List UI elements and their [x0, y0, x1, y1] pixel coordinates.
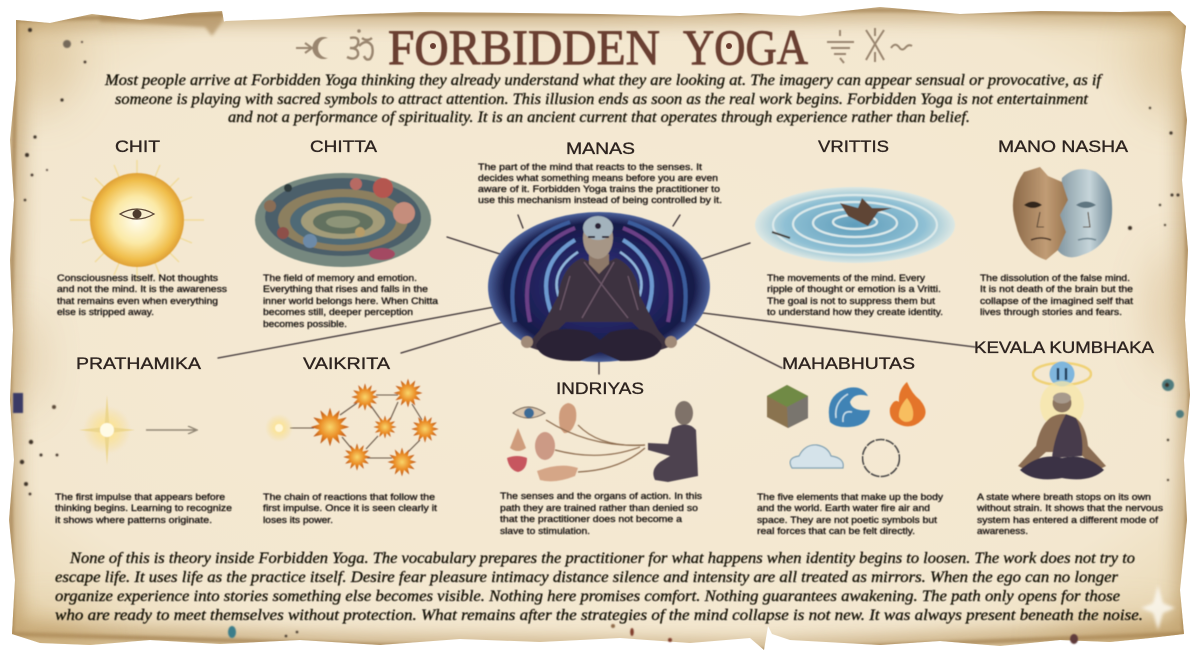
panel: vaikrita: The chain of reactions that follow the [263, 491, 435, 502]
icon: water wave [829, 387, 870, 427]
icon: earth cube [767, 385, 808, 428]
panel: prathamika: PRATHAMIKA [76, 354, 202, 373]
panel: vrittis: to understand how they create identity. [767, 306, 943, 317]
icon: left ornaments [296, 29, 373, 60]
panel: indriyas: that the practitioner does not become a [500, 513, 683, 524]
diagram: chain of reactions [265, 379, 439, 476]
panel: chit: Consciousness itself. Not thoughts [57, 272, 218, 283]
panel: indriyas: INDRIYAS [556, 379, 644, 398]
closing paragraph: organize experience into stories something else becomes visible. Nothing here promises comfort. Nothing guarantees awakening. The path only opens for those [55, 588, 1120, 605]
panel: vrittis [755, 137, 955, 317]
panel: chit: else is stripped away. [57, 306, 154, 317]
panel: mano nasha: MANO NASHA [998, 137, 1129, 156]
illustration: meditating figure in aura [488, 212, 710, 362]
panel: vaikrita: first impulse. Once it is seen clearly it [263, 502, 437, 513]
closing paragraph: None of this is theory inside Forbidden Yoga. The vocabulary prepares the practitioner for what happens when identity begins to loosen. The work does not try to [69, 550, 1135, 567]
illustration: senses tethered to practitioner [507, 401, 698, 482]
panel: mano nasha: lives through stories and fears. [980, 306, 1122, 317]
panel: mahabhutas: The five elements that make up the body [757, 491, 943, 502]
panel: mano nasha [980, 137, 1133, 317]
closing paragraph [55, 550, 1143, 624]
panel: chit [57, 137, 227, 317]
intro paragraph: and not a performance of spirituality. It is an ancient current that operates through experience rather than belief. [228, 109, 970, 126]
panel: mahabhutas: and the world. Earth water fire air and [757, 502, 930, 513]
panel: mano nasha: It is not death of the brain but the [980, 283, 1133, 294]
icon: sun with eye [70, 160, 204, 280]
panel: chitta: inner world belongs here. When Chitta [263, 295, 439, 306]
intro paragraph [104, 72, 1104, 126]
panel: chitta: becomes still, deeper perception [263, 306, 413, 317]
panel: indriyas: slave to stimulation. [500, 525, 590, 536]
panel: chitta: CHITTA [310, 137, 378, 156]
panel: kevala kumbhaka: KEVALA KUMBHAKA [974, 338, 1155, 357]
panel: indriyas: The senses and the organs of action. In this [500, 490, 702, 501]
panel: chitta: becomes possible. [263, 318, 347, 329]
panel: mahabhutas [757, 354, 943, 536]
closing paragraph: who are ready to meet themselves without protection. What remains after the strategies of the mind collapse is not new. It was always present beneath the noise. [55, 607, 1143, 624]
icon: mind lake disc [255, 173, 431, 267]
panel: chit: CHIT [115, 137, 160, 156]
panel: kevala kumbhaka: awareness. [977, 525, 1028, 536]
panel: vaikrita: VAIKRITA [303, 354, 391, 373]
panel: kevala kumbhaka: without strain. It shows that the nervous [976, 502, 1163, 513]
panel: manas: The part of the mind that reacts to the senses. It [478, 161, 702, 172]
panel: chitta [255, 137, 439, 329]
panel: manas: MANAS [566, 139, 635, 158]
arrow [146, 426, 197, 434]
panel: kevala kumbhaka [974, 338, 1163, 536]
icon: first impulse star [79, 395, 135, 465]
panel: chitta: Everything that rises and falls in the [263, 283, 428, 294]
icon: ripples and leaf [755, 187, 955, 263]
panel: prathamika: The first impulse that appears before [55, 491, 225, 502]
panel: chit: that remains even when everything [57, 295, 218, 306]
panel: kevala kumbhaka: system has entered a different mode of [977, 514, 1158, 525]
title [296, 19, 912, 75]
panel: vrittis: VRITTIS [818, 137, 889, 156]
panel: mahabhutas: real forces that can be felt directly. [757, 525, 915, 536]
panel: vrittis: ripple of thought or emotion is a Vritti. [767, 283, 941, 294]
icon: air cloud [790, 445, 843, 468]
icon: right ornaments [827, 28, 912, 63]
panel: chitta: The field of memory and emotion. [263, 272, 417, 283]
icon: pause halo [1033, 362, 1091, 386]
panel: mano nasha: The dissolution of the false mind. [980, 272, 1130, 283]
panel: vaikrita: loses its power. [263, 514, 333, 525]
title: FORBIDDEN [388, 19, 660, 75]
intro paragraph: Most people arrive at Forbidden Yoga thinking they already understand what they are looking at. The imagery can appear sensual or provocative, as if [104, 72, 1104, 89]
intro paragraph: someone is playing with sacred symbols to attract attention. This illusion ends as soon as the real work begins. Forbidden Yoga is not entertainment [115, 91, 1089, 108]
illustration: seated practitioner [1018, 381, 1106, 479]
panel: vrittis: The movements of the mind. Every [767, 272, 925, 283]
panel: mahabhutas: MAHABHUTAS [782, 354, 915, 373]
panel: mano nasha: collapse of the imagined self that [980, 295, 1133, 306]
panel: chit: and not the mind. It is the awareness [57, 283, 227, 294]
panel: vrittis: The goal is not to suppress them but [767, 295, 935, 306]
panel: prathamika [55, 354, 232, 525]
panel: manas: decides what something means before you are even [478, 172, 718, 183]
panel: indriyas: path they are trained rather than denied so [500, 502, 698, 513]
icon: space circle [862, 440, 900, 476]
closing paragraph: escape life. It uses life as the practice itself. Desire fear pleasure intimacy distance silence and intensity are all treated as mirrors. When the ego can no longer [55, 569, 1119, 586]
panel: mahabhutas: space. They are not poetic symbols but [757, 514, 937, 525]
icon: broken mask [1013, 167, 1112, 260]
panel: manas: aware of it. Forbidden Yoga trains the practitioner to [478, 183, 720, 194]
panel: prathamika: it shows where patterns originate. [55, 514, 212, 525]
panel: indriyas [500, 379, 702, 536]
panel: manas: use this mechanism instead of being controlled by it. [478, 194, 722, 205]
icon: fire flame [890, 382, 926, 426]
title: YOGA [683, 19, 808, 75]
sparkle [1141, 585, 1175, 630]
panel: prathamika: thinking begins. Learning to recognize [55, 502, 232, 513]
panel: kevala kumbhaka: A state where breath stops on its own [977, 491, 1151, 502]
connector lines [218, 215, 975, 374]
panel: manas [478, 139, 722, 362]
panel: vaikrita [263, 354, 439, 525]
